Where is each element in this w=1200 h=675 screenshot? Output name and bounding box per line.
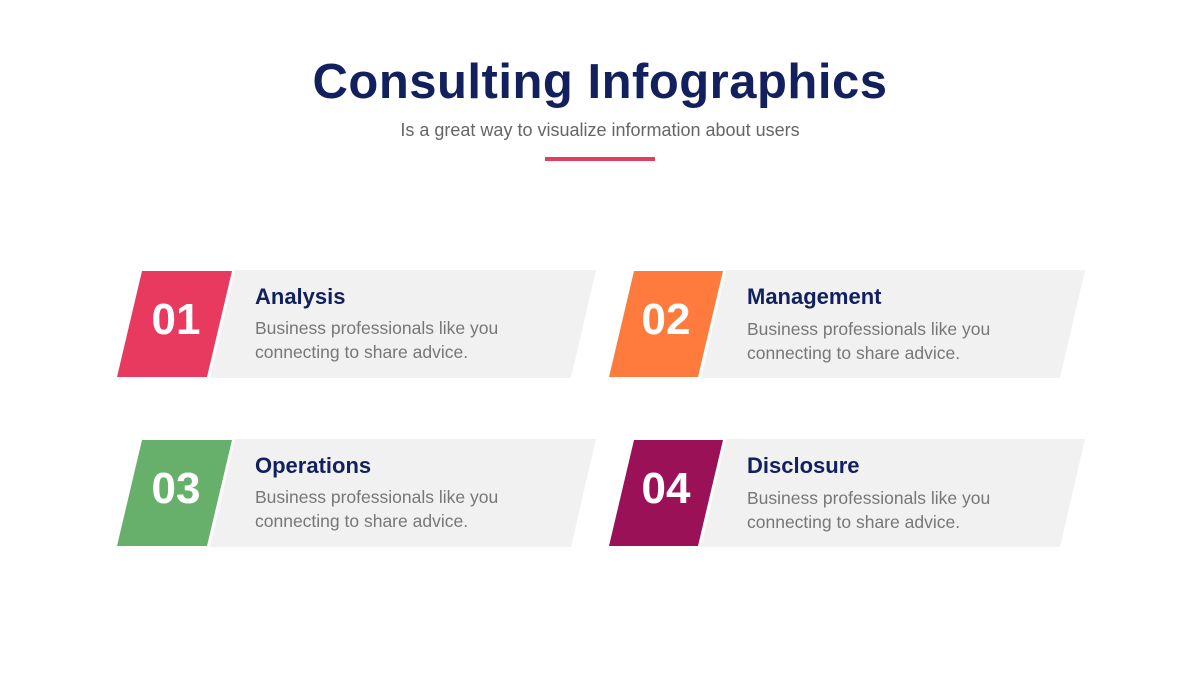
card: management: [609, 270, 1085, 378]
card: analysis: 01: [152, 295, 200, 344]
card: analysis: connecting to share advice.: [255, 342, 468, 362]
card: disclosure: [609, 439, 1085, 547]
card: operations: Operations: [255, 453, 371, 478]
card: management: Business professionals like you: [747, 319, 990, 339]
card: analysis: Analysis: [255, 284, 346, 309]
card: management: Management: [747, 284, 882, 309]
card: operations: 03: [152, 464, 200, 513]
card: analysis: Business professionals like you: [255, 318, 498, 338]
card: operations: Business professionals like you: [255, 487, 498, 507]
card: operations: connecting to share advice.: [255, 511, 468, 531]
card: disclosure: connecting to share advice.: [747, 512, 960, 532]
card: disclosure: 04: [642, 464, 691, 513]
card: management: connecting to share advice.: [747, 343, 960, 363]
card: disclosure: Business professionals like you: [747, 488, 990, 508]
title: Consulting Infographics: [312, 55, 887, 109]
card: analysis: [117, 270, 596, 378]
card: disclosure: Disclosure: [747, 453, 860, 478]
card: management: 02: [642, 295, 690, 344]
subtitle: Is a great way to visualize information about users: [400, 120, 800, 140]
accent underline: [545, 157, 655, 161]
card: operations: [117, 439, 596, 547]
